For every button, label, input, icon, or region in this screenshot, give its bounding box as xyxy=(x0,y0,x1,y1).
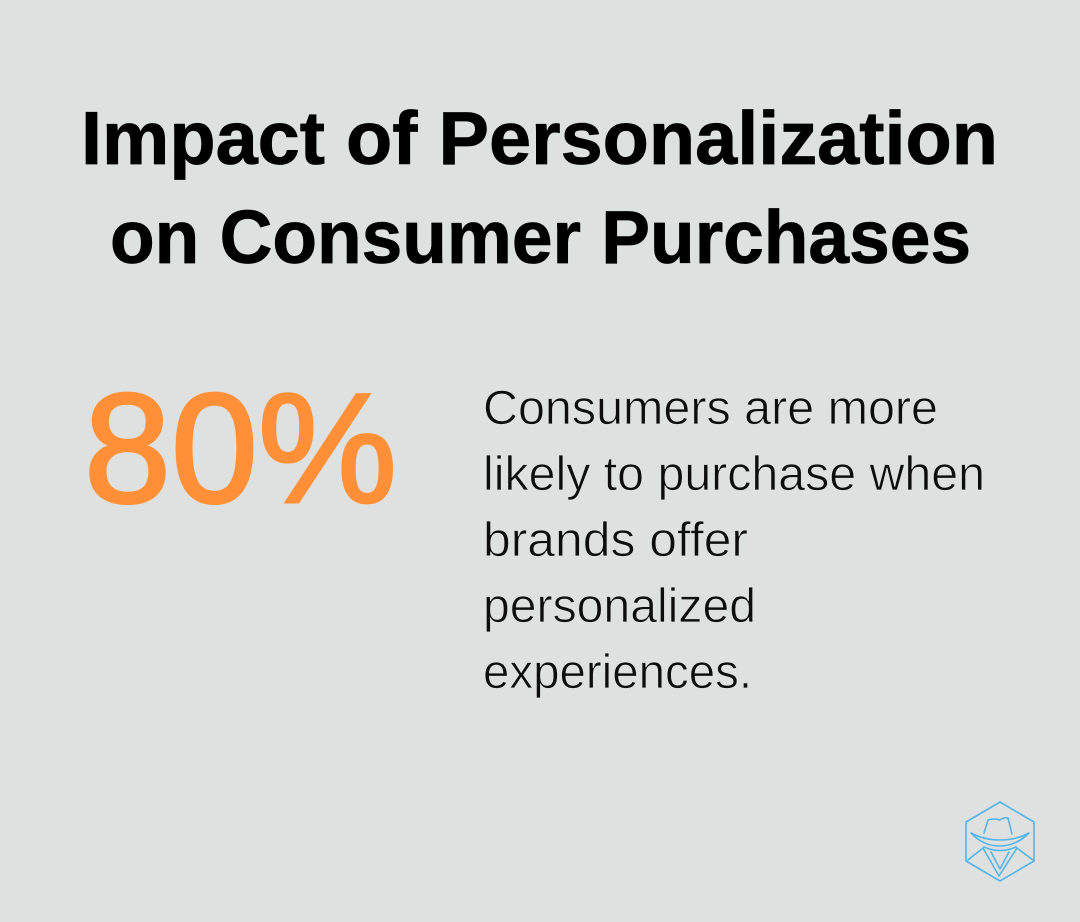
description text: experiences. xyxy=(483,646,752,699)
icon: hat xyxy=(971,818,1029,846)
icon: collar xyxy=(968,847,1033,876)
title xyxy=(81,96,998,279)
description text xyxy=(483,382,985,699)
description text: personalized xyxy=(483,580,756,633)
description text: brands offer xyxy=(483,514,748,567)
description text: Consumers are more xyxy=(483,382,938,435)
statistic: 80%: 80% xyxy=(84,362,397,536)
title: Impact of Personalization xyxy=(81,96,998,180)
title: on Consumer Purchases xyxy=(110,195,971,279)
icon: hexagon spy logo xyxy=(966,802,1034,881)
description text: likely to purchase when xyxy=(483,448,985,501)
icon: hexagon outline xyxy=(966,802,1034,881)
